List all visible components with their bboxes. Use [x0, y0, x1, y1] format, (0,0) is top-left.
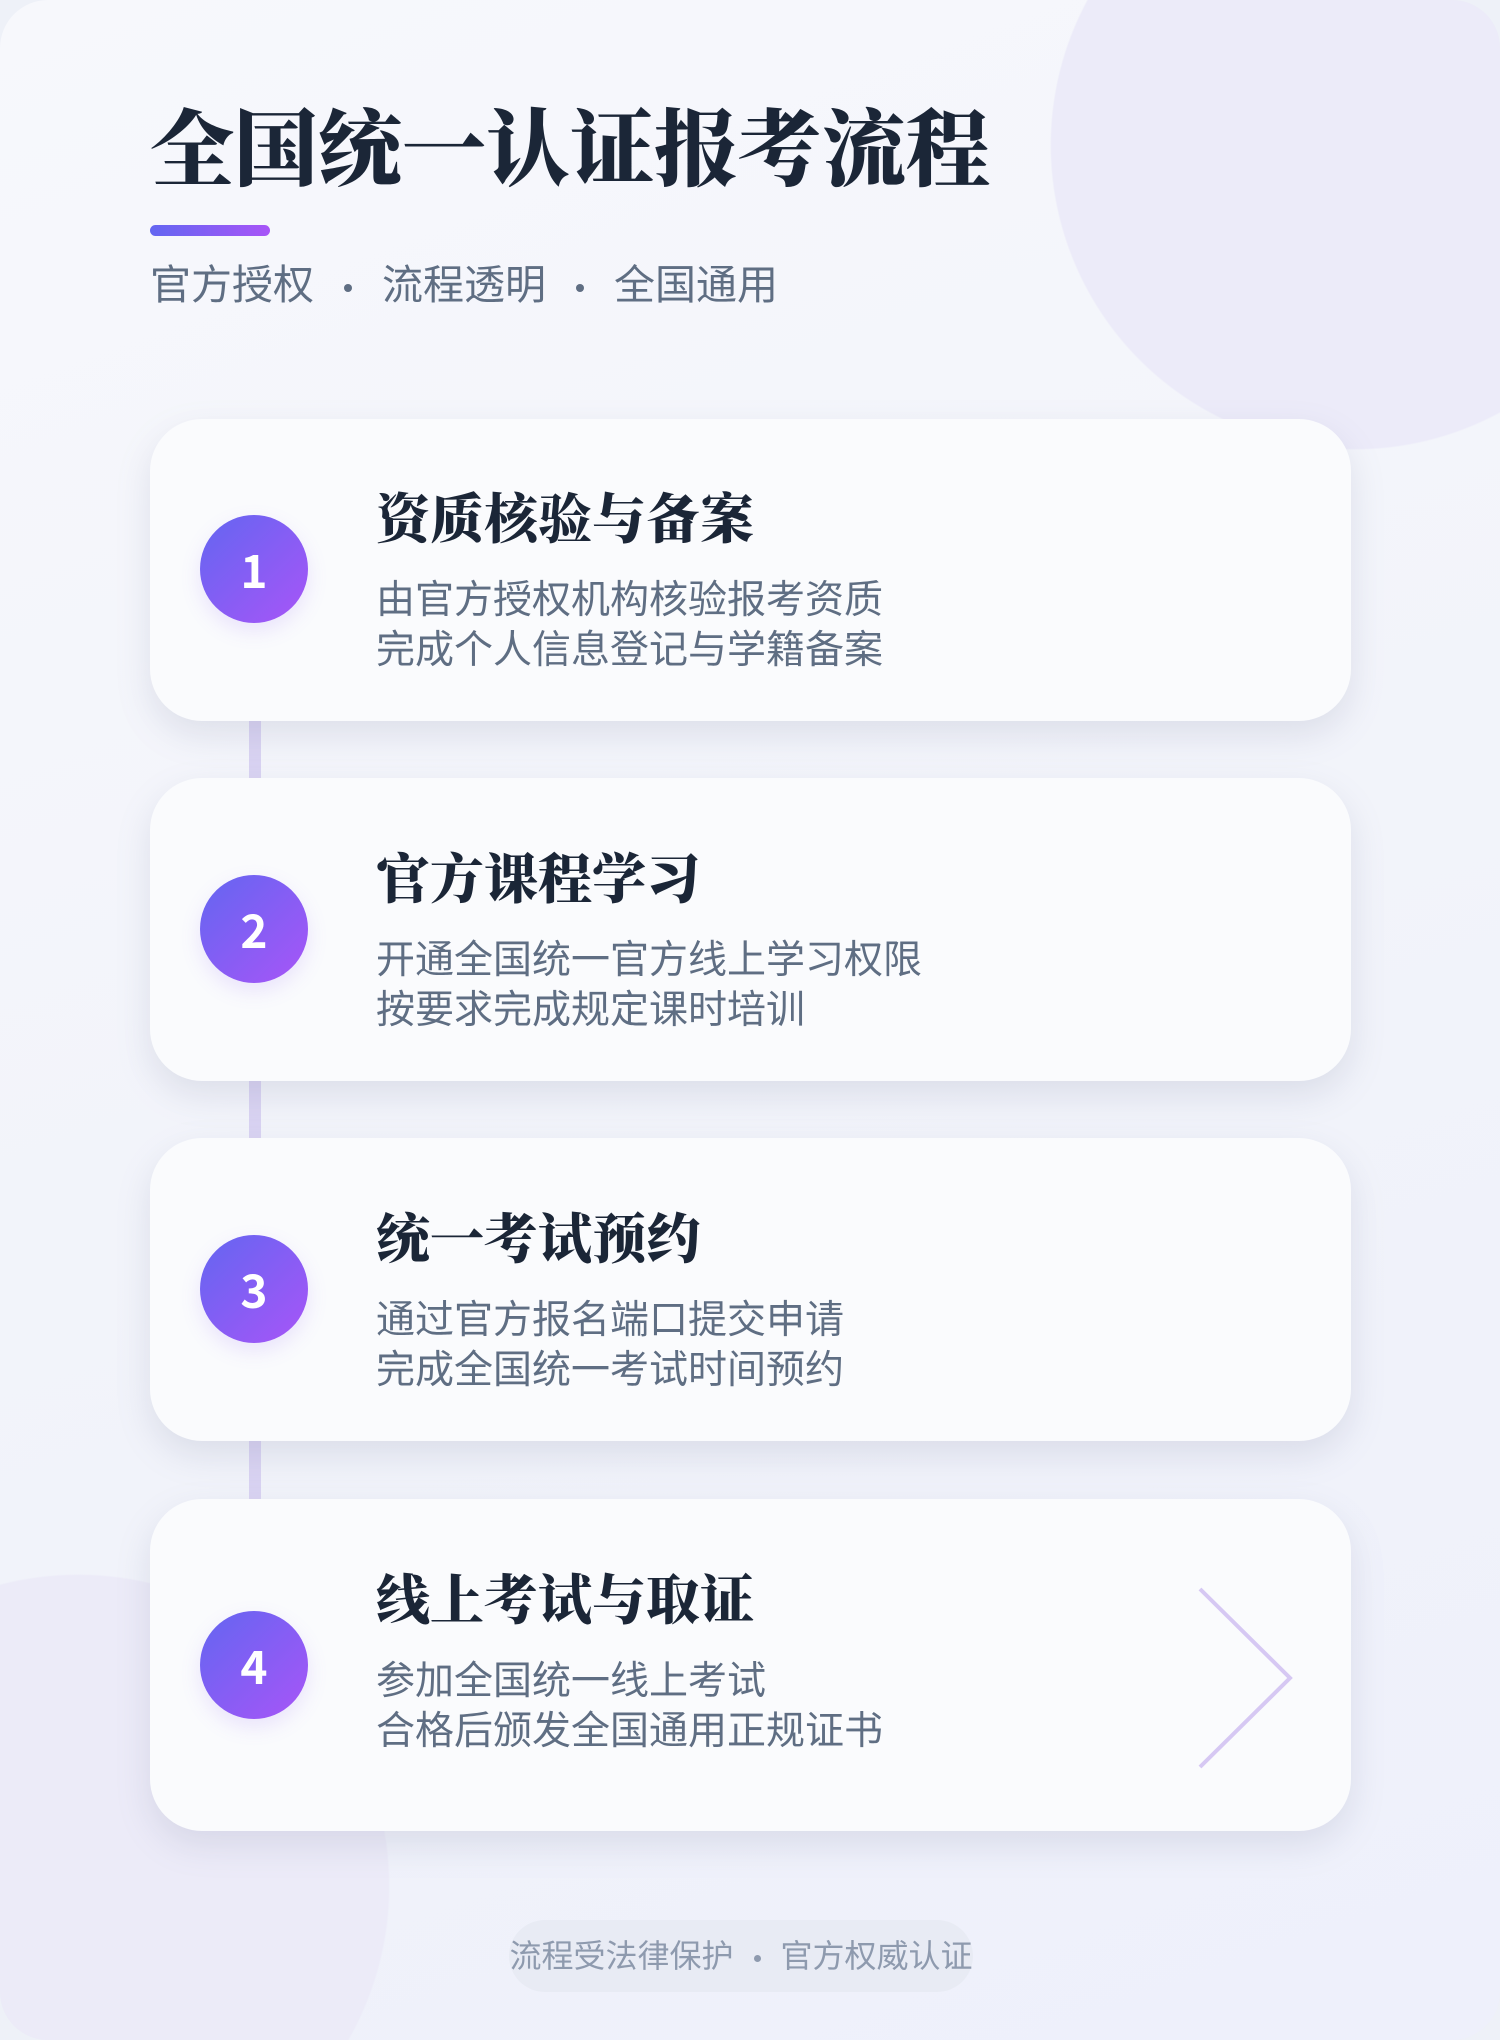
badge 4	[200, 1611, 308, 1719]
heading 4: 线上考试与取证	[376, 1571, 754, 1631]
heading 3: 统一考试预约	[376, 1210, 700, 1270]
description 2: 开通全国统一官方线上学习权限	[376, 939, 922, 982]
timeline line	[249, 481, 261, 1737]
title: 全国统一认证报考流程	[150, 105, 990, 198]
badge 2: 2	[240, 896, 268, 962]
description 2	[376, 939, 922, 1032]
badge 3	[200, 1235, 308, 1343]
icon: chevron arrow	[1198, 1588, 1293, 1768]
badge 3: 3	[240, 1256, 268, 1322]
card: step 4	[150, 1499, 1351, 1831]
description 3: 通过官方报名端口提交申请	[376, 1299, 844, 1342]
description 4: 合格后颁发全国通用正规证书	[376, 1710, 883, 1753]
badge 1: 1	[240, 536, 268, 602]
description 2: 按要求完成规定课时培训	[376, 989, 805, 1032]
heading 2: 官方课程学习	[376, 850, 700, 910]
card: step 1	[150, 419, 1351, 721]
description 1: 由官方授权机构核验报考资质	[376, 579, 883, 622]
title underline accent	[150, 225, 270, 236]
badge 2	[200, 875, 308, 983]
footer pill: 流程受法律保护 官方权威认证	[509, 1938, 973, 1974]
badge 4: 4	[240, 1632, 268, 1698]
card: step 2	[150, 778, 1351, 1081]
badge 1	[200, 515, 308, 623]
connector 3-4	[249, 1441, 261, 1499]
connector 2-3	[249, 1081, 261, 1138]
description 1: 完成个人信息登记与学籍备案	[376, 629, 883, 672]
heading 1: 资质核验与备案	[376, 490, 754, 550]
connector 1-2	[249, 721, 261, 778]
description 3	[376, 1299, 844, 1392]
description 4	[376, 1660, 883, 1753]
description 3: 完成全国统一考试时间预约	[376, 1349, 844, 1392]
subtitle: 官方授权 流程透明 全国通用	[150, 262, 778, 308]
footer pill	[509, 1920, 973, 1992]
description 1	[376, 579, 883, 672]
description 4: 参加全国统一线上考试	[376, 1660, 766, 1703]
card: step 3	[150, 1138, 1351, 1441]
